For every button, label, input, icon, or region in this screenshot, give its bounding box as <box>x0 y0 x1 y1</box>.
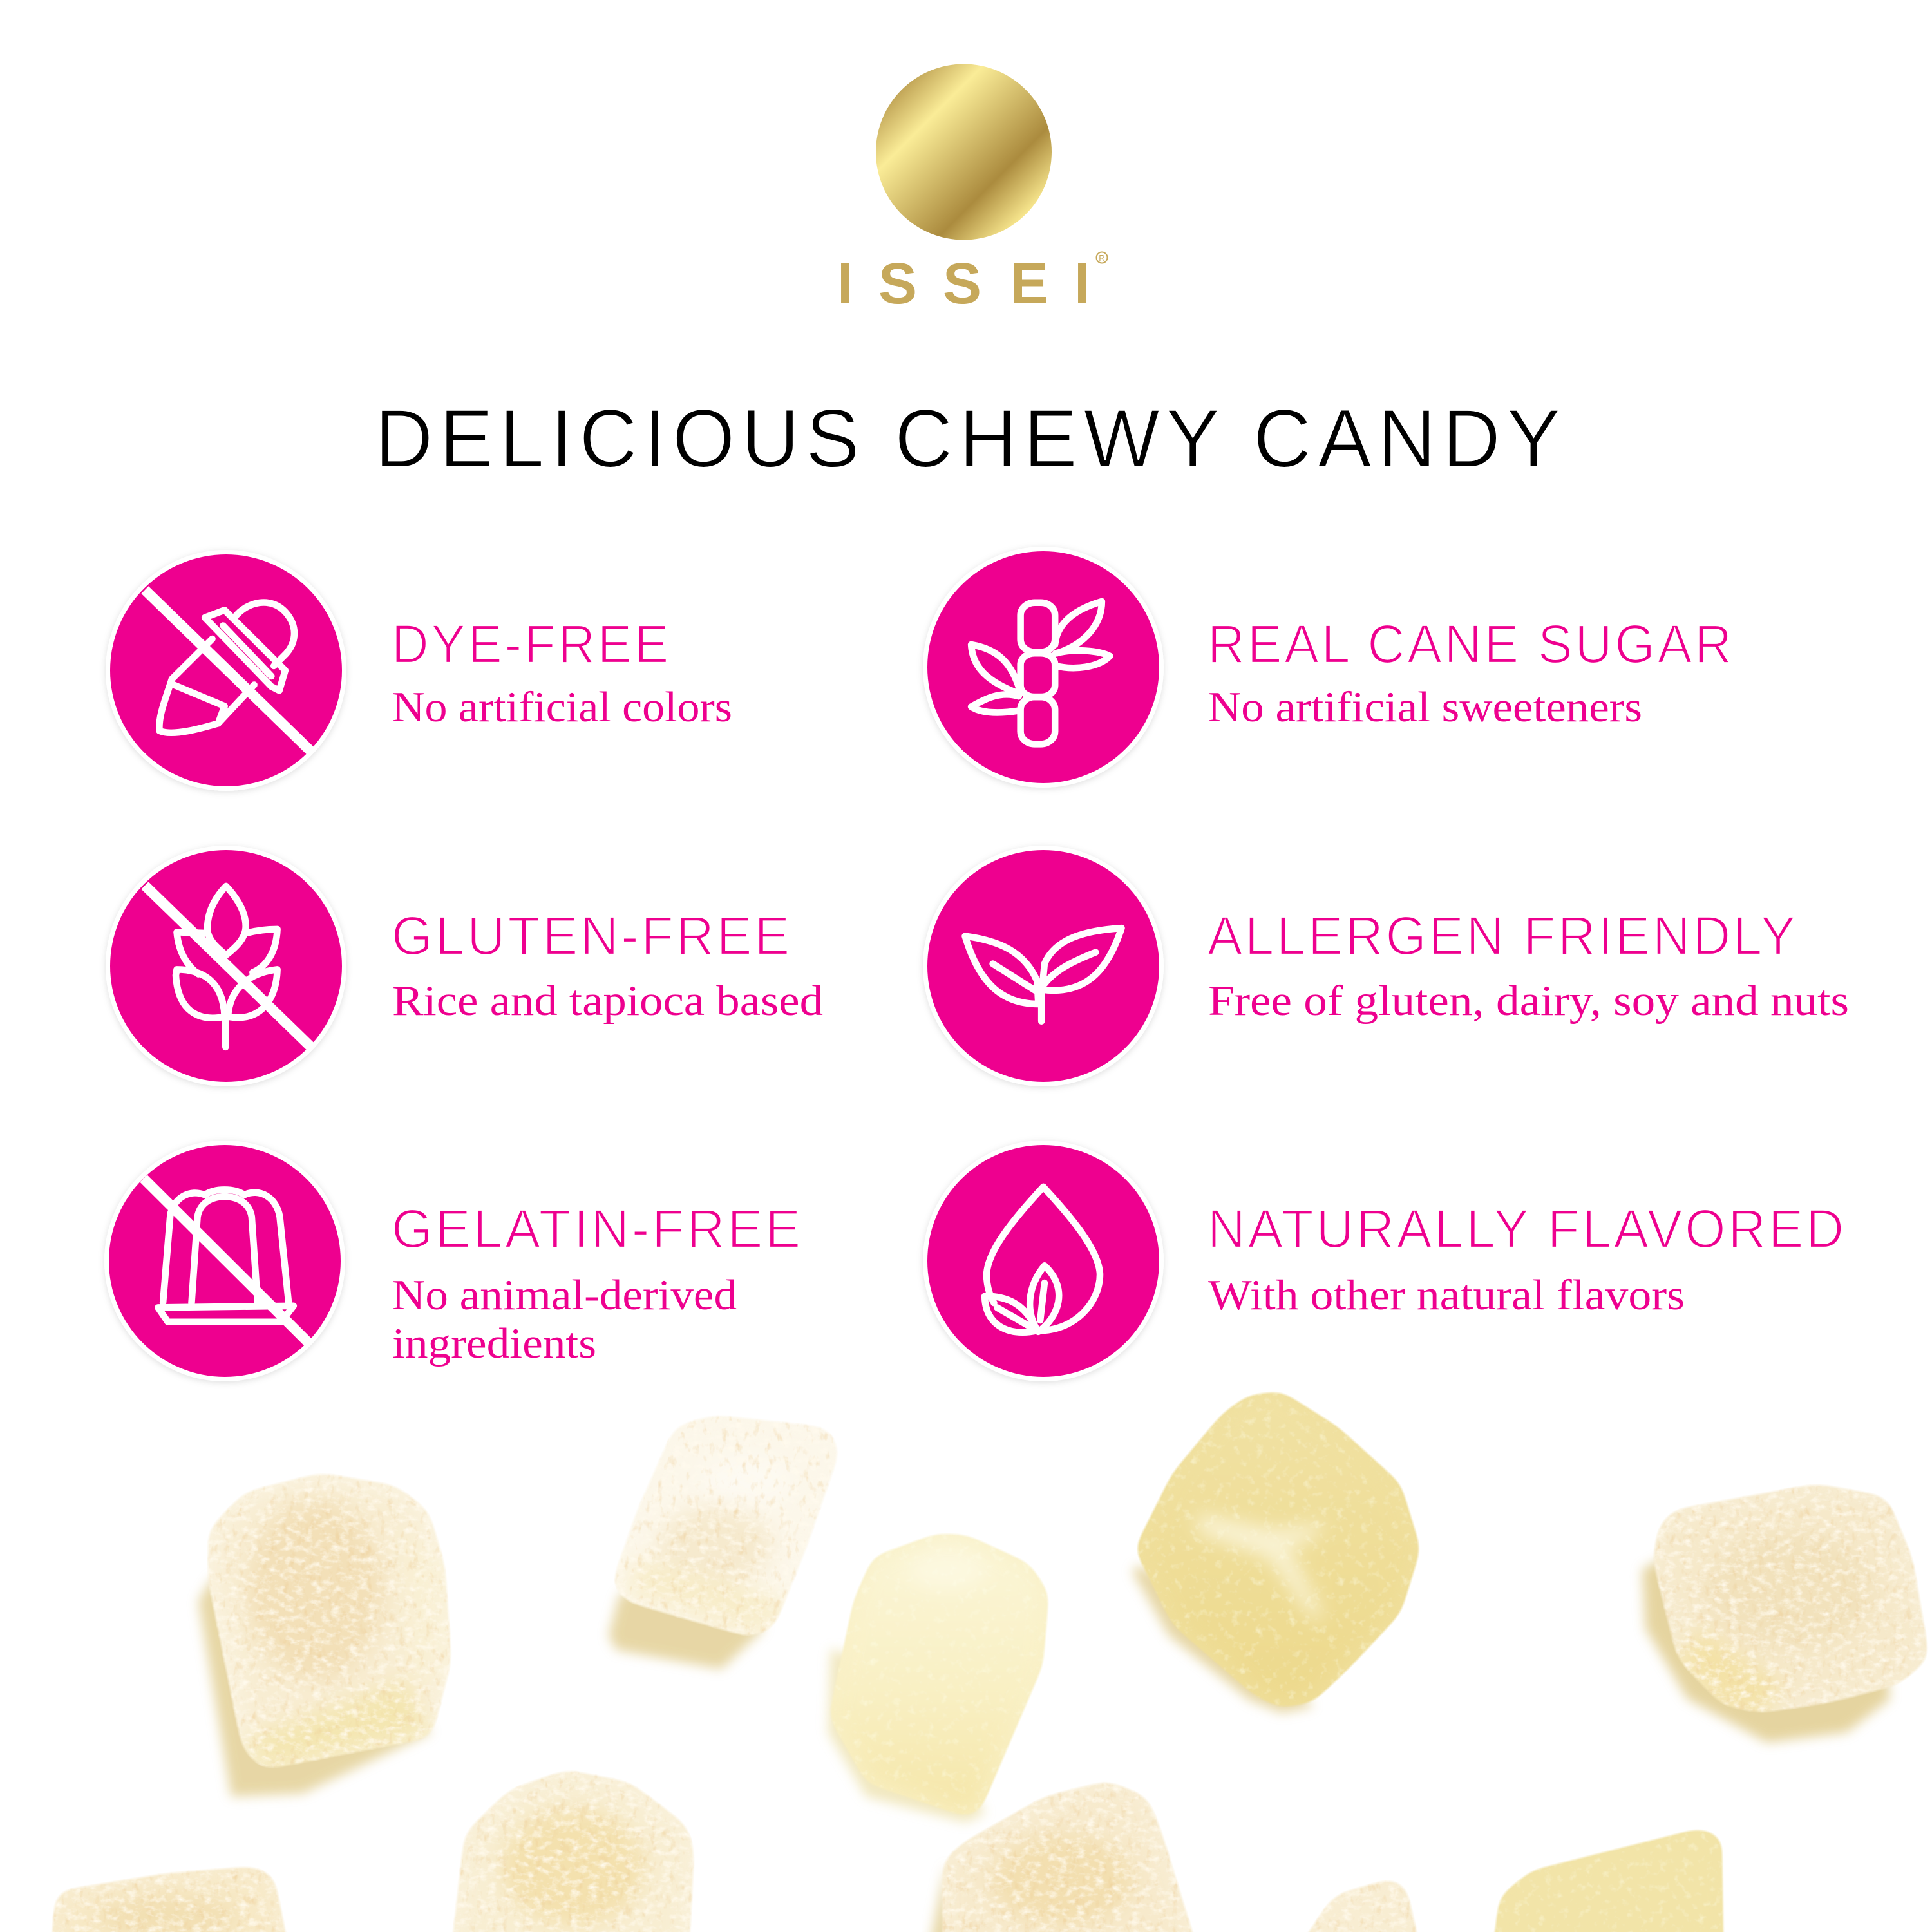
candy: large left piece <box>198 1477 447 1797</box>
candy: bottom centre-left piece <box>453 1774 690 1932</box>
description: allergen friendly: Free of gluten, dairy, soy and nuts <box>1208 977 1849 1025</box>
registered mark <box>1096 252 1108 263</box>
label: allergen friendly: ALLERGEN FRIENDLY <box>1208 905 1798 966</box>
logo <box>837 64 1108 316</box>
description: gluten-free: Rice and tapioca based <box>392 977 823 1025</box>
label: real cane sugar: REAL CANE SUGAR <box>1208 614 1734 674</box>
candy: upper small white piece <box>609 1419 835 1669</box>
description: real cane sugar: No artificial sweeteners <box>1208 683 1642 731</box>
icon: crossed-out wheat <box>106 846 346 1086</box>
feature: gluten-free <box>106 846 823 1086</box>
candy: bottom right yellow piece <box>1493 1832 1721 1932</box>
logo gold circle <box>876 64 1052 240</box>
ISSEI wordmark: ISSEI <box>837 252 1090 316</box>
description: gelatin-free: No animal-derived <box>392 1271 737 1319</box>
icon: sugar cane <box>923 547 1164 788</box>
candy: yellow diamond piece <box>1132 1395 1417 1713</box>
candy: bottom small piece <box>1287 1882 1422 1932</box>
description: naturally flavored: With other natural flavors <box>1208 1271 1685 1319</box>
label: gelatin-free: GELATIN-FREE <box>392 1198 803 1259</box>
icon: two leaves <box>923 846 1164 1086</box>
feature: gelatin-free <box>104 1141 803 1381</box>
candy: bottom left piece <box>52 1870 290 1932</box>
title: DELICIOUS CHEWY CANDY <box>375 393 1567 485</box>
candy: right wrinkled piece <box>1642 1488 1926 1743</box>
feature: naturally flavored <box>923 1141 1846 1381</box>
label: gluten-free: GLUTEN-FREE <box>392 905 792 966</box>
registered mark: R <box>1099 253 1105 263</box>
feature: dye-free <box>106 550 732 791</box>
label: dye-free: DYE-FREE <box>392 614 671 674</box>
candy pieces photo <box>52 1395 1926 1932</box>
candy: bottom centre piece <box>927 1785 1200 1932</box>
icon: crossed-out dropper <box>106 550 346 791</box>
feature: allergen friendly <box>923 846 1849 1086</box>
candy: centre translucent piece <box>828 1537 1046 1823</box>
label: naturally flavored: NATURALLY FLAVORED <box>1208 1198 1846 1259</box>
icon: crossed-out jelly <box>104 1141 345 1381</box>
feature: real cane sugar <box>923 547 1734 788</box>
icon: drop with leaves <box>923 1141 1164 1381</box>
description second line: gelatin-free: ingredients <box>392 1320 596 1367</box>
description: dye-free: No artificial colors <box>392 683 732 731</box>
